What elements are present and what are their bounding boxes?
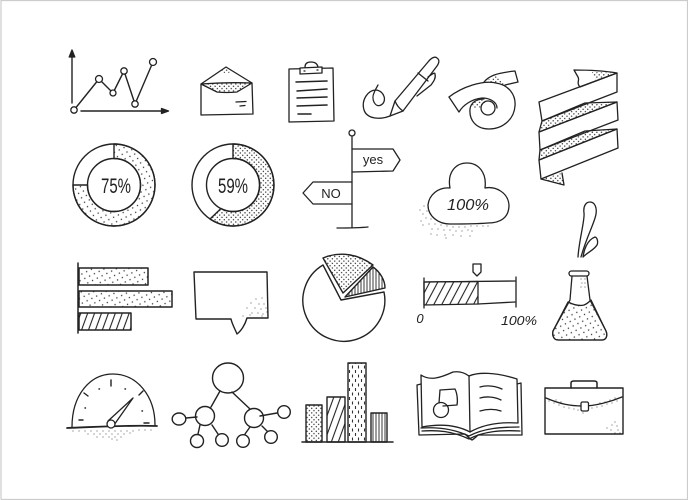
speedometer gauge icon [67,374,157,440]
label: yes: yes [363,152,384,167]
pie chart icon [303,254,385,341]
spiral ribbon banner icon [539,70,618,185]
line chart icon [69,50,168,114]
open book icon [417,372,522,440]
speech bubble icon [194,272,268,334]
cloud 100% icon [420,163,509,238]
donut chart 59% [192,144,274,226]
label: 0: 0 [416,311,424,326]
pen icon [363,57,439,118]
column chart icon [302,363,393,442]
flask icon [553,202,607,340]
label: 59%: 59% [218,175,248,198]
clipboard icon [289,62,334,122]
label: NO: NO [321,186,341,201]
briefcase icon [545,381,623,434]
label: 100%: 100% [447,197,489,214]
progress bar icon [416,264,537,328]
envelope icon [201,67,253,115]
curl ribbon icon [449,71,518,129]
label: 75%: 75% [101,175,131,198]
label: 100%: 100% [501,313,537,328]
marker [473,264,481,276]
horizontal bar chart icon [78,263,172,333]
network diagram icon [172,363,290,448]
signpost icon [303,130,400,228]
donut chart 75% [73,144,155,226]
